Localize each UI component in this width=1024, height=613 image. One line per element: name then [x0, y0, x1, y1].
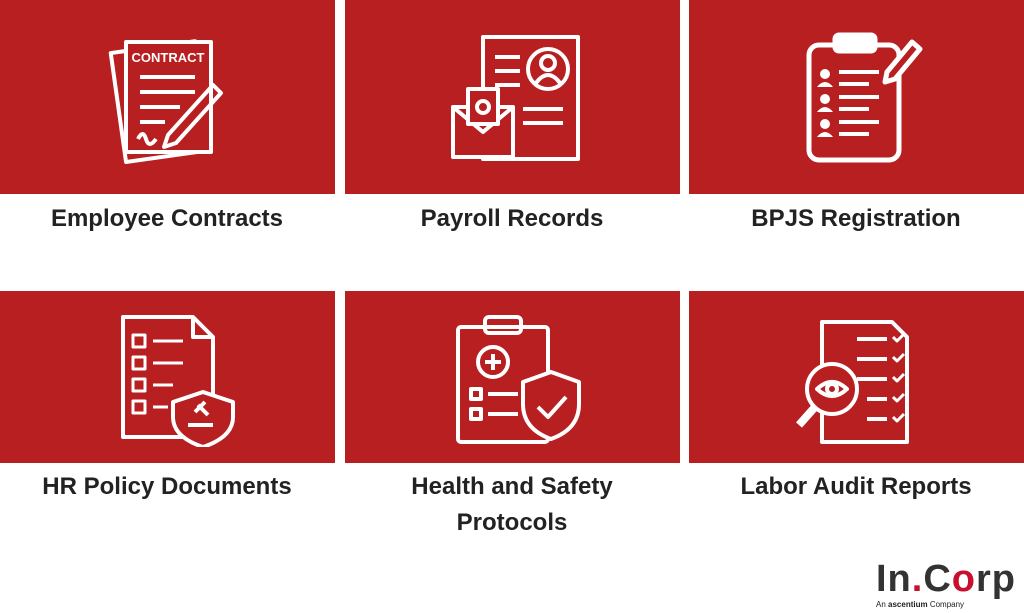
label: health and safety protocols: Protocols [457, 509, 567, 536]
panel: health and safety [345, 291, 680, 463]
label: labor audit reports: Labor Audit Reports [740, 473, 972, 500]
icon: clipboard [806, 32, 922, 162]
icon: payroll [451, 35, 580, 161]
logo: InCorp: In.Corp [876, 558, 1016, 600]
label: health and safety protocols: Health and Safety [411, 473, 613, 500]
icon: policy document [121, 315, 235, 447]
label: employee contracts: Employee Contracts [51, 205, 283, 232]
label: BPJS registration: BPJS Registration [751, 205, 961, 232]
label: HR policy documents: HR Policy Documents [42, 473, 292, 500]
panel: employee contracts [0, 0, 335, 194]
icon: medical clipboard with shield [456, 315, 581, 444]
label: payroll records: Payroll Records [421, 205, 603, 232]
panel: HR policy [0, 291, 335, 463]
icon: contract [108, 39, 224, 164]
panel: BPJS registration [689, 0, 1024, 194]
label: health and safety protocols [411, 473, 613, 536]
logo: InCorp: An ascentium Company [876, 600, 964, 609]
icon: audit magnifier [796, 320, 909, 444]
panel: payroll records [345, 0, 680, 194]
icon: contract: CONTRACT [131, 50, 204, 65]
panel: labor audit [689, 291, 1024, 463]
